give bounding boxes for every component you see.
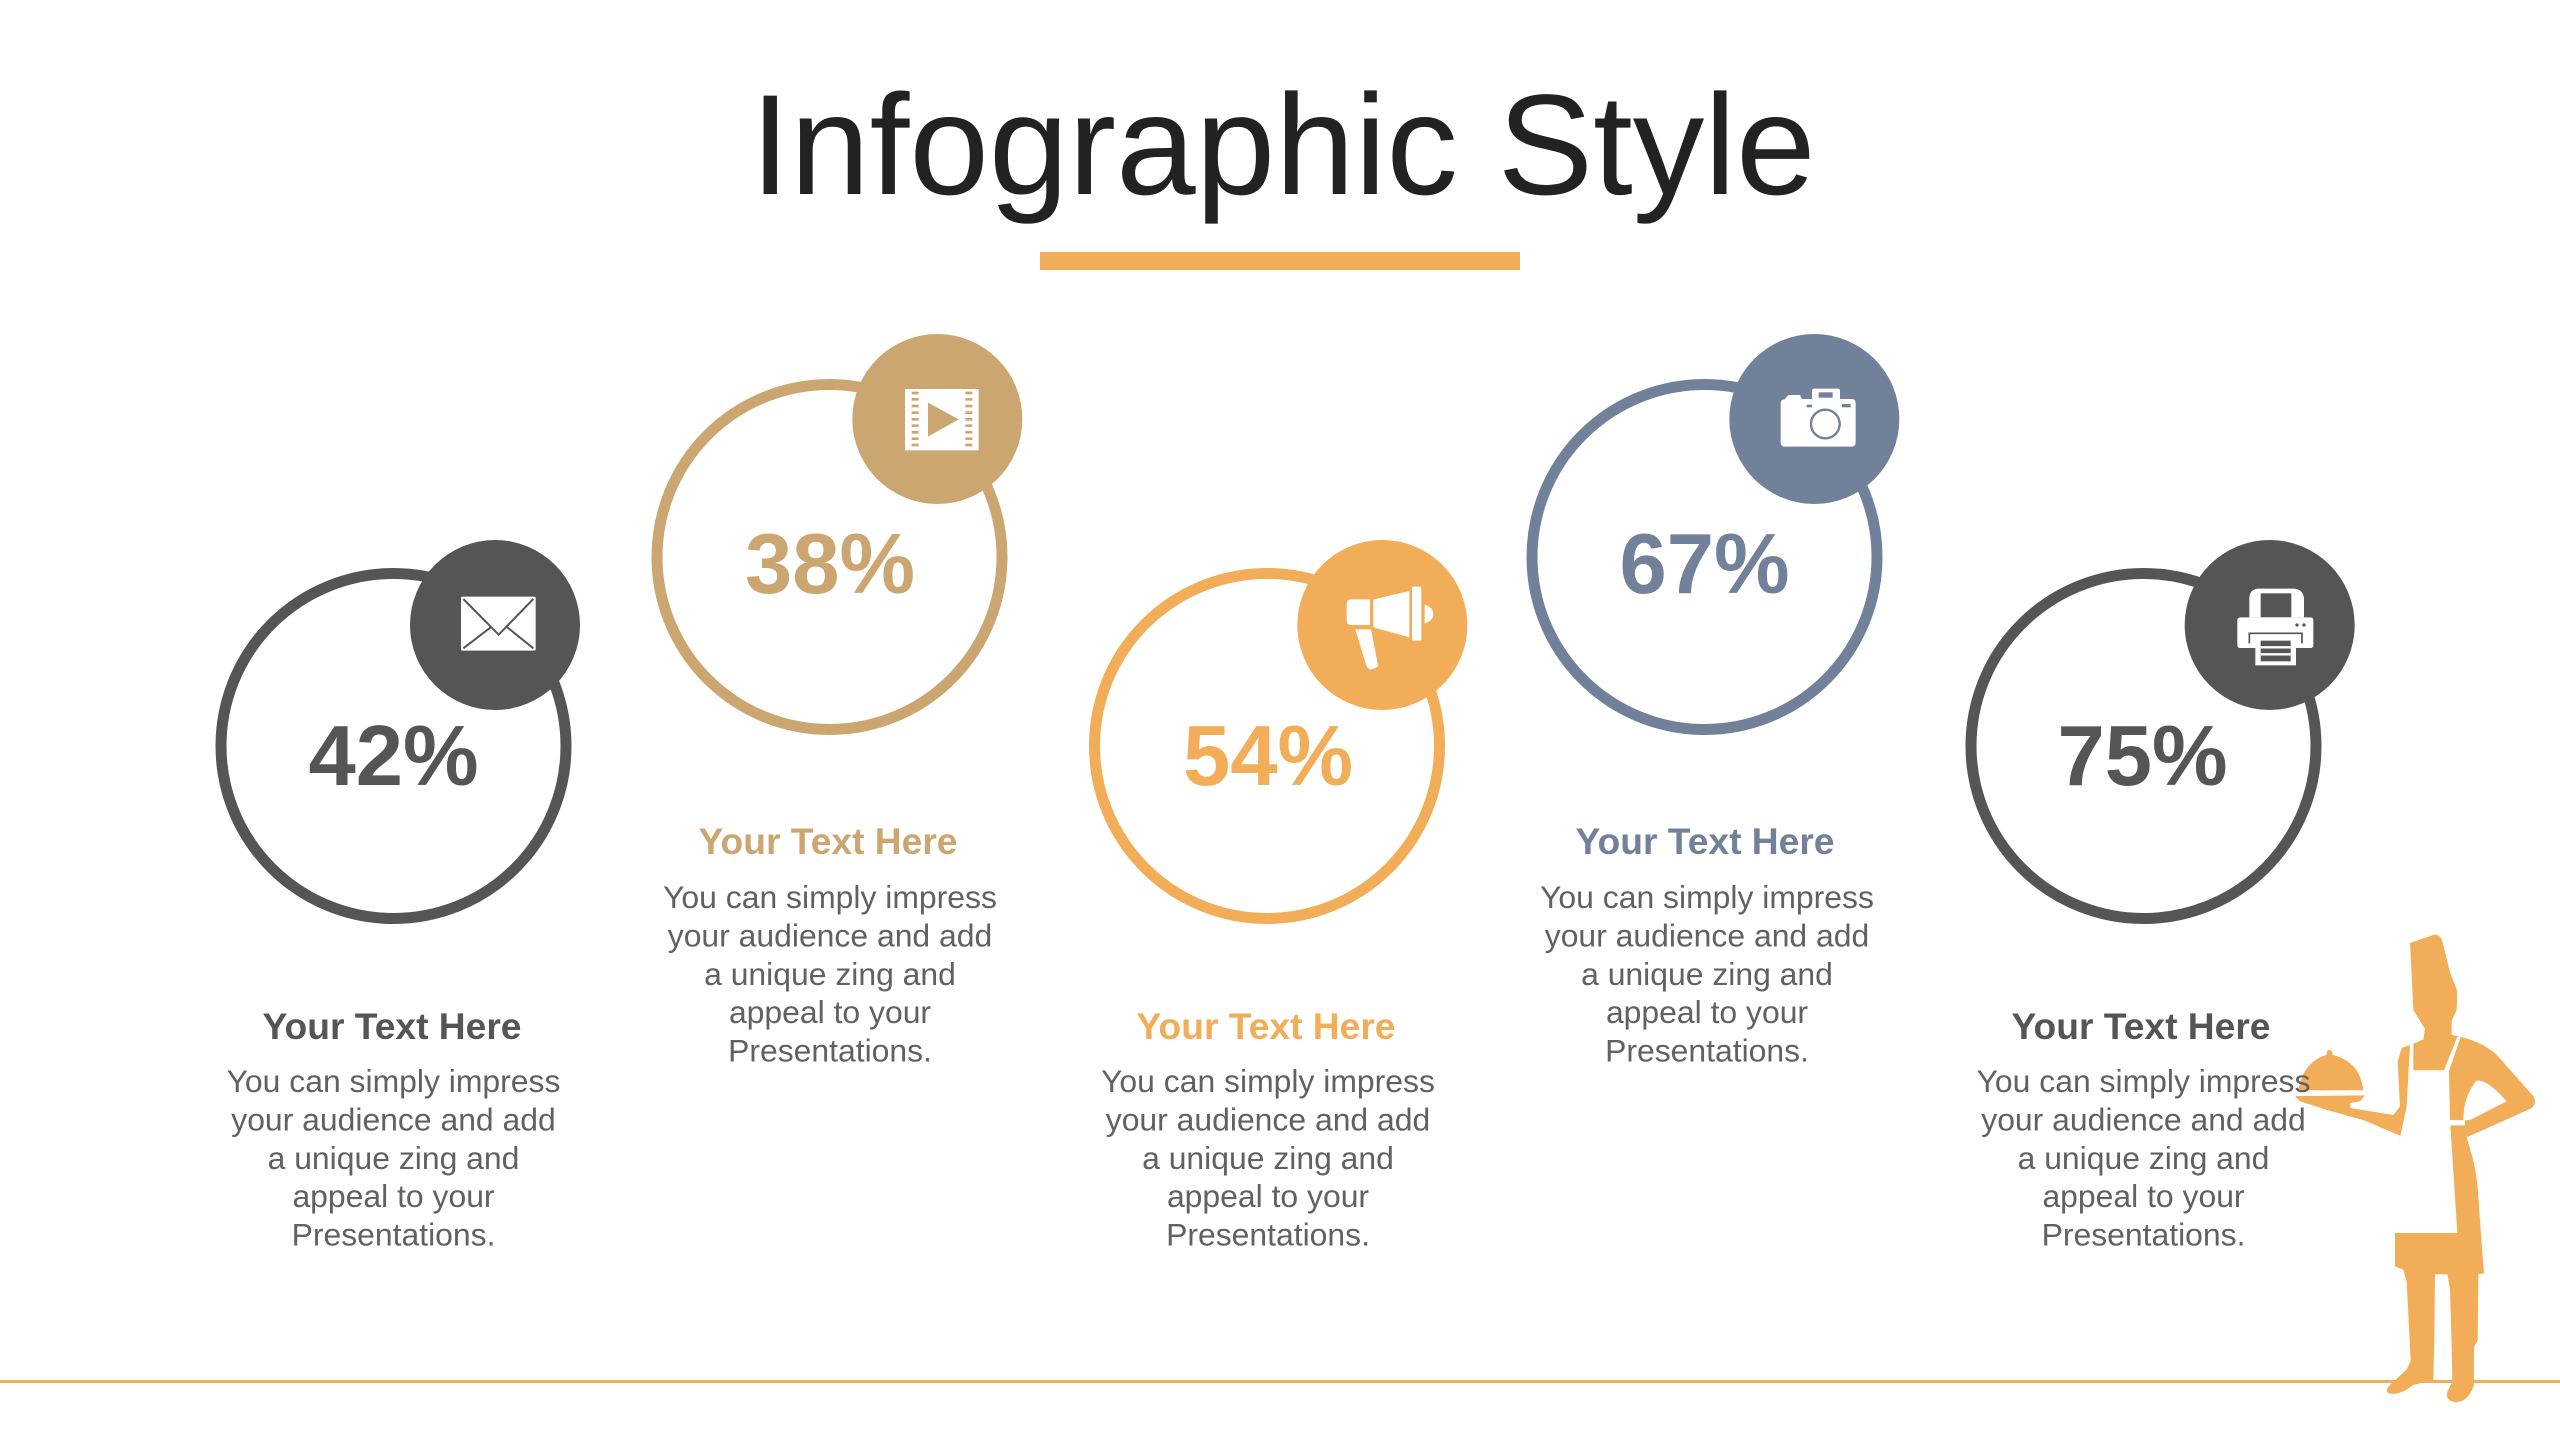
card 3: 54% <box>1094 540 1467 1253</box>
description: appeal to your <box>729 994 931 1030</box>
description: a unique zing and <box>704 956 956 992</box>
description: appeal to your <box>1606 994 1808 1030</box>
description: You can simply impress <box>663 879 997 915</box>
icon badge: envelope <box>410 540 580 710</box>
ring 4 <box>1532 384 1877 730</box>
heading: Your Text Here <box>1575 820 1835 862</box>
icon badge: megaphone <box>1297 540 1467 710</box>
ground line <box>0 1380 2560 1383</box>
description: appeal to your <box>2042 1178 2245 1214</box>
card 2: 38% <box>657 334 1022 1069</box>
description: Presentations. <box>1605 1033 1809 1069</box>
icon badge: camera <box>1729 334 1899 504</box>
description: You can simply impress <box>1101 1063 1435 1099</box>
description: your audience and add <box>1981 1101 2306 1137</box>
description: You can simply impress <box>227 1063 560 1099</box>
description: appeal to your <box>292 1178 495 1214</box>
ring 1 <box>221 574 566 918</box>
ring 2 <box>657 384 1002 730</box>
description: your audience and add <box>668 917 992 953</box>
heading: Your Text Here <box>1136 1005 1396 1047</box>
value: 38% <box>745 517 915 612</box>
description: a unique zing and <box>2018 1140 2269 1176</box>
value: 54% <box>1183 709 1353 804</box>
ring 5 <box>1971 574 2316 918</box>
card 5: 75% <box>1971 540 2355 1253</box>
heading: Your Text Here <box>262 1005 522 1047</box>
heading: Your Text Here <box>2011 1005 2271 1047</box>
title underline <box>1040 252 1520 270</box>
description: a unique zing and <box>1581 956 1833 992</box>
description: your audience and add <box>231 1101 556 1137</box>
description: Presentations. <box>292 1217 495 1253</box>
value: 42% <box>308 709 479 804</box>
title: Infographic Style <box>750 66 1816 225</box>
description: your audience and add <box>1106 1101 1430 1137</box>
ring 3 <box>1094 574 1440 918</box>
description: You can simply impress <box>1977 1063 2310 1099</box>
description: Presentations. <box>1166 1217 1370 1253</box>
description: Presentations. <box>2042 1217 2245 1253</box>
card 1: 42% <box>221 540 580 1253</box>
icon badge: printer <box>2185 540 2355 710</box>
description: your audience and add <box>1545 917 1869 953</box>
value: 67% <box>1619 517 1790 612</box>
card 4: 67% <box>1532 334 1899 1069</box>
description: appeal to your <box>1167 1178 1369 1214</box>
icon badge: film play <box>852 334 1022 504</box>
description: a unique zing and <box>268 1140 519 1176</box>
heading: Your Text Here <box>698 820 958 862</box>
description: You can simply impress <box>1540 879 1874 915</box>
value: 75% <box>2057 709 2228 804</box>
description: a unique zing and <box>1142 1140 1394 1176</box>
illustration: chef holding a cloche <box>2295 934 2535 1402</box>
description: Presentations. <box>728 1033 932 1069</box>
